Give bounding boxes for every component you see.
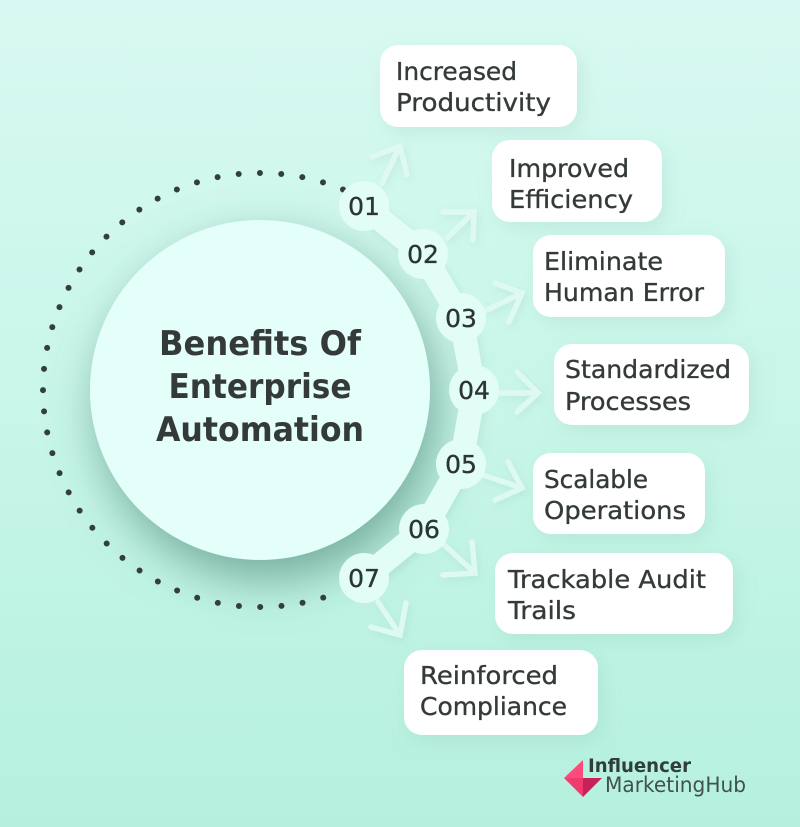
logo: Influencer MarketingHub: Influencer	[588, 755, 692, 777]
node 05	[436, 439, 486, 489]
card: Reinforced Compliance: Compliance	[420, 692, 567, 721]
card: Standardized Processes: Standardized	[565, 355, 731, 384]
node 03: 03	[445, 304, 477, 333]
card: Reinforced Compliance	[404, 650, 598, 735]
node 06	[399, 504, 449, 554]
arrow 01	[372, 146, 407, 183]
arrow 03	[487, 283, 522, 322]
arrow 02	[443, 212, 474, 240]
card: Increased Productivity: Increased	[396, 57, 517, 86]
card: Scalable Operations: Operations	[544, 496, 686, 525]
title: Enterprise	[168, 367, 352, 407]
number nodes	[339, 181, 499, 603]
card: Scalable Operations	[533, 453, 705, 534]
card: Eliminate Human Error	[533, 235, 725, 317]
card: Reinforced Compliance: Reinforced	[420, 661, 558, 690]
node 02	[398, 229, 448, 279]
logo: Influencer MarketingHub	[564, 755, 746, 797]
node 03	[436, 293, 486, 343]
node 07: 07	[348, 564, 380, 593]
card: Improved Efficiency: Improved	[509, 154, 629, 183]
title	[156, 324, 364, 450]
logo icon	[564, 760, 602, 797]
central circle	[90, 220, 430, 560]
card: Standardized Processes	[554, 344, 749, 425]
title: Automation	[156, 410, 364, 450]
node 05: 05	[445, 450, 477, 479]
node 02: 02	[407, 240, 439, 269]
card: Trackable Audit Trails: Trails	[507, 596, 576, 625]
dotted arc	[43, 173, 343, 607]
node 06: 06	[408, 515, 440, 544]
card: Eliminate Human Error: Human Error	[544, 278, 705, 307]
node 04: 04	[458, 376, 490, 405]
node 01: 01	[348, 192, 380, 221]
card: Scalable Operations: Scalable	[544, 465, 648, 494]
connecting path	[364, 206, 474, 578]
arrow 07	[371, 602, 406, 635]
card: Improved Efficiency: Efficiency	[509, 185, 633, 214]
card: Trackable Audit Trails	[495, 553, 733, 634]
card: Standardized Processes: Processes	[565, 387, 691, 416]
card: Eliminate Human Error: Eliminate	[544, 247, 663, 276]
node 01	[339, 181, 389, 231]
node 04	[449, 365, 499, 415]
arrow 05	[483, 462, 522, 500]
card: Increased Productivity	[380, 45, 577, 127]
arrow 04	[500, 372, 538, 412]
title: Benefits Of	[159, 324, 362, 364]
node 07	[339, 553, 389, 603]
arrows	[371, 146, 538, 635]
logo: Influencer MarketingHub: MarketingHub	[605, 773, 746, 797]
arrow 06	[442, 542, 475, 575]
card: Improved Efficiency	[492, 140, 662, 222]
card: Increased Productivity: Productivity	[396, 88, 551, 117]
card: Trackable Audit Trails: Trackable Audit	[507, 565, 706, 594]
